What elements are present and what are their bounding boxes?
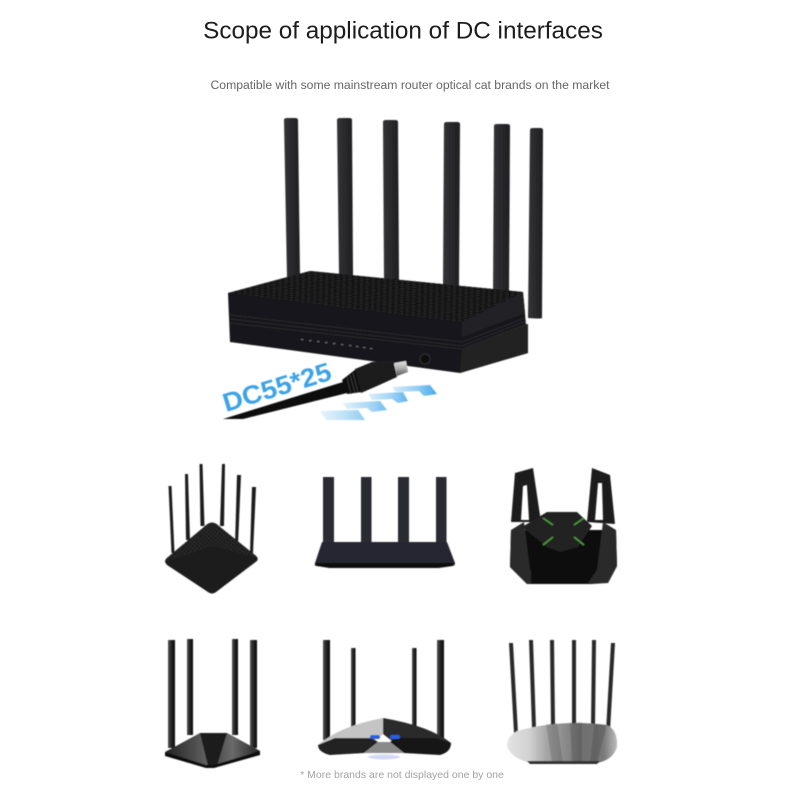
power cable bbox=[223, 382, 347, 419]
cable connector bbox=[342, 360, 408, 394]
fan folds bbox=[546, 722, 607, 763]
green light bars bbox=[543, 518, 584, 545]
router base side bbox=[460, 324, 528, 373]
router: silver fan six antennas bbox=[507, 640, 617, 764]
footnote: * More brands are not displayed one by one bbox=[300, 769, 504, 781]
speed chevrons bbox=[320, 385, 437, 420]
router: gaming with green lights bbox=[510, 468, 617, 584]
power port bbox=[420, 354, 430, 364]
router vent band bbox=[230, 315, 527, 349]
DC size label: DC55*25 bbox=[219, 356, 335, 418]
router body block bbox=[228, 271, 528, 373]
title: Scope of application of DC interfaces bbox=[203, 18, 603, 44]
blue LEDs bbox=[370, 735, 400, 739]
antennas of main router bbox=[284, 118, 543, 318]
subtitle: Compatible with some mainstream router optical cat brands on the market bbox=[211, 78, 610, 92]
router: six antenna diamond bbox=[165, 464, 258, 594]
router top dotted surface bbox=[228, 271, 523, 322]
router: Tenda silver and black bbox=[318, 640, 451, 760]
main router with DC cable bbox=[219, 118, 543, 420]
router: four flat antennas bbox=[315, 477, 455, 568]
status LEDs bbox=[301, 339, 372, 349]
router: dual-band black four antennas bbox=[165, 639, 260, 768]
router upper side bbox=[462, 292, 525, 337]
